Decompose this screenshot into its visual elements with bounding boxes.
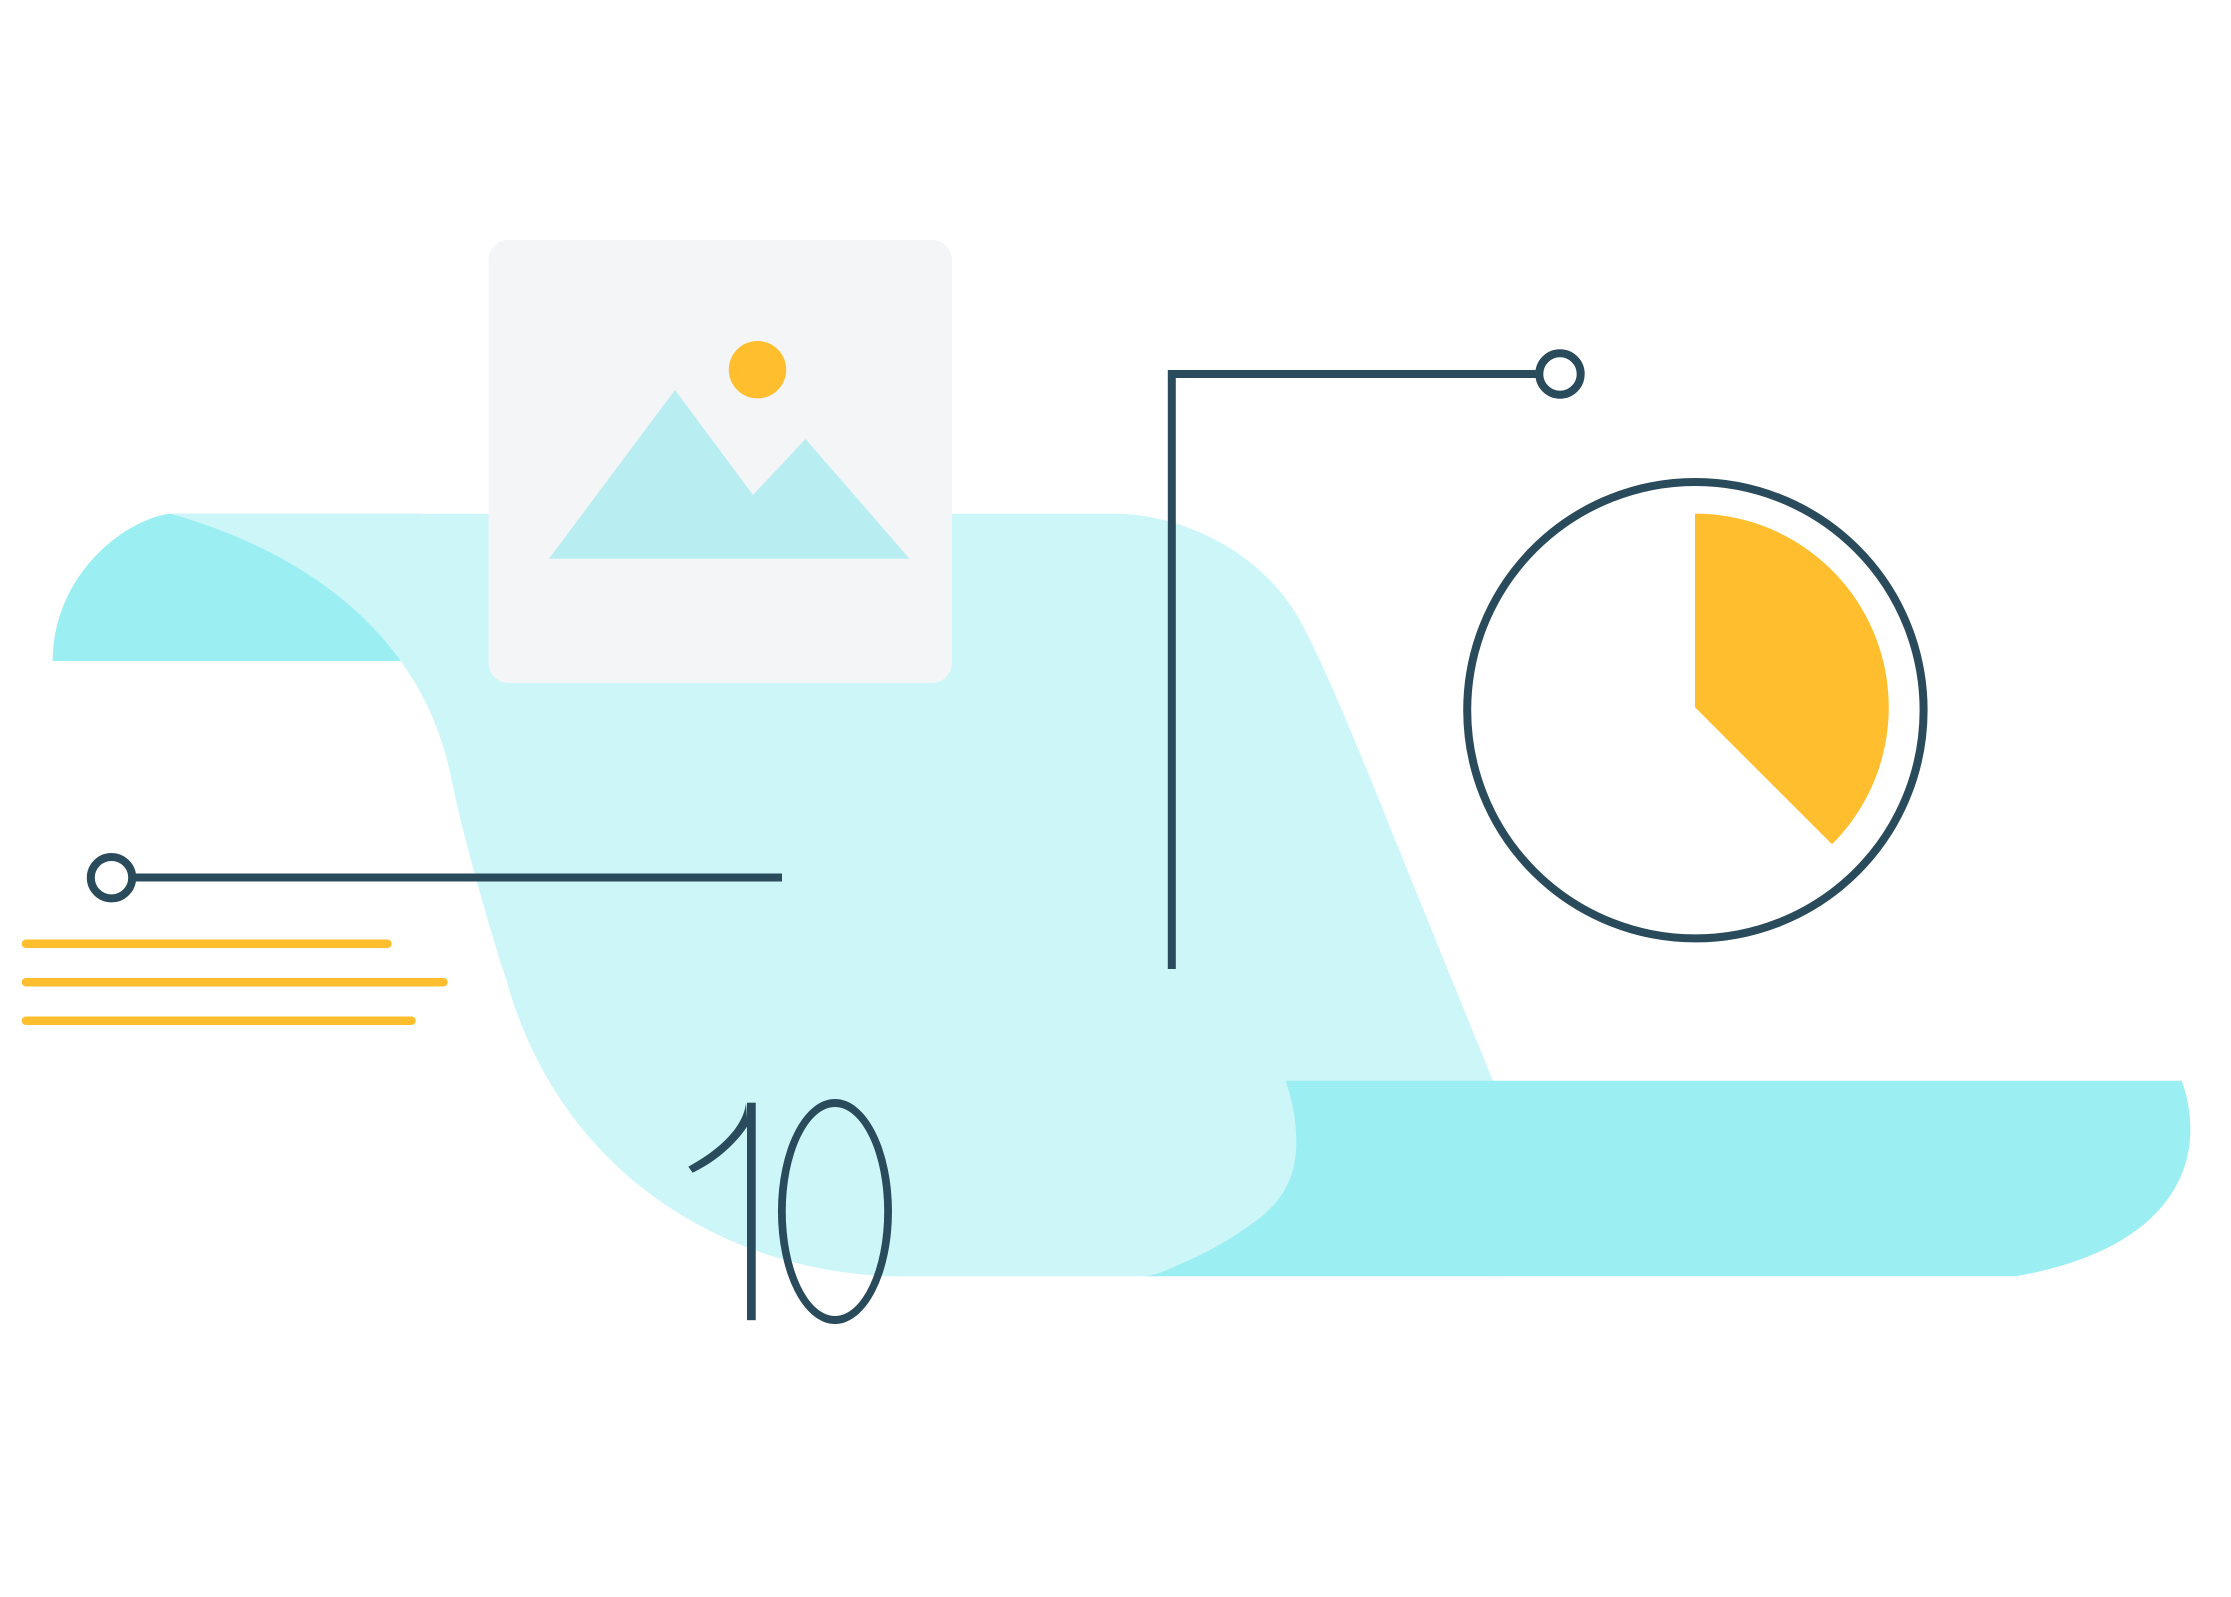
number 10 (688, 1099, 892, 1324)
digits: 10 (671, 1024, 909, 1399)
pie clock (1467, 482, 1924, 938)
icon: sun (729, 341, 786, 398)
infographic illustration (22, 240, 2190, 1324)
line 1 (22, 940, 392, 948)
line 2 (22, 978, 448, 986)
left aqua shape (53, 514, 420, 661)
background blob: light aqua wave (170, 514, 1493, 1276)
pie slice (1695, 514, 1889, 844)
top connector with ring (1172, 353, 1581, 969)
line 3 (22, 1016, 416, 1025)
bottom right aqua shape (1145, 1081, 2190, 1276)
card panel (488, 240, 952, 683)
digit one flag stroke (688, 1103, 748, 1173)
clock outline (1467, 482, 1924, 938)
elbow connector line (1172, 374, 1537, 969)
connector ring (91, 857, 132, 898)
connector line (135, 874, 782, 882)
icon: mountains (549, 390, 910, 559)
text placeholder lines (22, 940, 448, 1025)
image card (488, 240, 952, 683)
left connector with ring (91, 857, 782, 898)
connector ring (1539, 353, 1581, 395)
